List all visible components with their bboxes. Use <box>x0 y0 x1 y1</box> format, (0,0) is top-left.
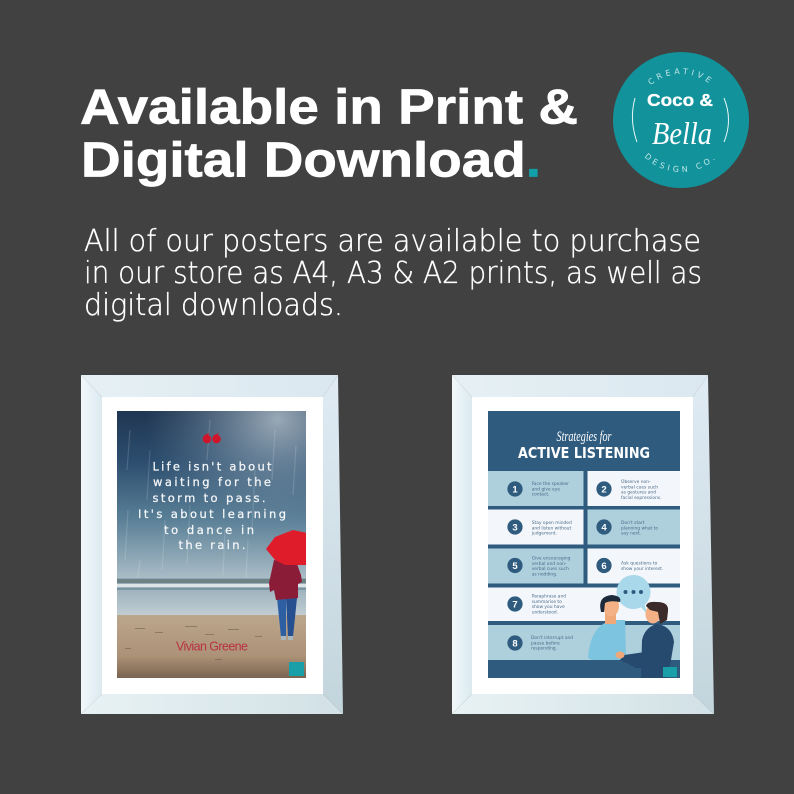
strategy text: verbal cues such <box>621 484 658 490</box>
two people talking <box>588 595 674 678</box>
strategy text: as nodding. <box>532 571 557 577</box>
woman with red umbrella <box>266 530 307 640</box>
strategy text: Give encouraging <box>532 556 571 562</box>
logo: Coco & Bella Creative Design Co.: CREATIVE <box>648 68 712 84</box>
author: Vivian Greene <box>176 640 248 654</box>
strategy text: Paraphrase and <box>532 594 566 600</box>
brand badge <box>289 662 304 676</box>
number badges: 5 <box>512 561 518 572</box>
title: Available in Print & <box>80 79 578 134</box>
strategy text: planning what to <box>621 525 658 531</box>
title <box>80 79 578 188</box>
strategy text: Don't start <box>621 520 645 526</box>
strategy text: facial expressions. <box>621 495 662 501</box>
strategy text: Ask questions to <box>621 560 658 566</box>
strategy text <box>531 479 663 652</box>
quote text: Life isn't about <box>152 460 272 474</box>
strategy text: Observe non- <box>621 479 651 485</box>
poster heading <box>518 429 650 462</box>
logo: Coco & Bella Creative Design Co. <box>613 52 749 188</box>
brand badge <box>663 667 677 677</box>
framed poster: Vivian Greene quote <box>81 375 343 714</box>
quote text: It's about learning <box>138 507 286 521</box>
strategy text: verbal and non- <box>532 561 567 567</box>
poster heading: ACTIVE LISTENING <box>518 444 650 462</box>
quote text: waiting for the <box>153 475 271 489</box>
strategy text: and listen without <box>532 525 571 531</box>
strategy text: verbal cues such <box>532 566 569 572</box>
strategy text: pause before <box>531 640 560 646</box>
framed poster: Active Listening <box>452 375 714 714</box>
rainy beach photo <box>117 411 306 678</box>
strategy text: contact. <box>532 492 550 498</box>
number badges <box>507 481 612 651</box>
frame <box>81 375 343 714</box>
strategy text: as gestures and <box>621 490 656 496</box>
strategy text: show you have <box>532 604 565 610</box>
infographic canvas <box>80 52 749 714</box>
strategy text: responding. <box>531 646 557 652</box>
poster background <box>488 411 680 678</box>
quote text: to dance in <box>164 523 254 537</box>
strategy text: say next. <box>621 531 641 537</box>
intro text <box>84 224 702 323</box>
strategy text: Stay open minded <box>532 520 572 526</box>
frame <box>452 375 714 714</box>
strategy text: and give eye <box>532 486 560 492</box>
number badges: 3 <box>512 522 518 534</box>
strategy text: Face the speaker <box>532 481 569 487</box>
quote text: the rain. <box>178 538 246 552</box>
intro text: All of our posters are available to purchase <box>84 224 701 259</box>
quote mark <box>203 433 221 443</box>
number badges: 7 <box>512 600 518 610</box>
white mat <box>472 397 693 694</box>
quote text <box>138 460 286 552</box>
number badges: 6 <box>601 561 607 572</box>
strategy text: summarise to <box>532 599 562 605</box>
strategy text: Don't interrupt and <box>531 635 573 641</box>
intro text: in our store as A4, A3 & A2 prints, as well as <box>84 256 702 291</box>
intro text: digital downloads. <box>84 288 343 323</box>
number badges: 1 <box>512 484 518 496</box>
quote text: storm to pass. <box>152 491 266 505</box>
logo: Coco & Bella Creative Design Co.: Coco & <box>647 90 713 110</box>
white mat <box>102 397 323 694</box>
title: Digital Download . <box>81 133 541 188</box>
logo: Coco & Bella Creative Design Co.: DESIGN CO. <box>644 153 715 172</box>
speech bubble <box>616 575 650 614</box>
strategy text: show your interest. <box>621 566 663 572</box>
strategy text: understood. <box>532 609 558 615</box>
strategy rows <box>488 471 680 660</box>
logo: Coco & Bella Creative Design Co.: Bella <box>652 115 712 151</box>
number badges: 2 <box>601 484 607 496</box>
number badges: 4 <box>601 522 607 534</box>
number badges: 8 <box>512 638 518 650</box>
strategy text: judgement. <box>531 531 557 537</box>
poster heading: Strategies for <box>556 429 612 445</box>
